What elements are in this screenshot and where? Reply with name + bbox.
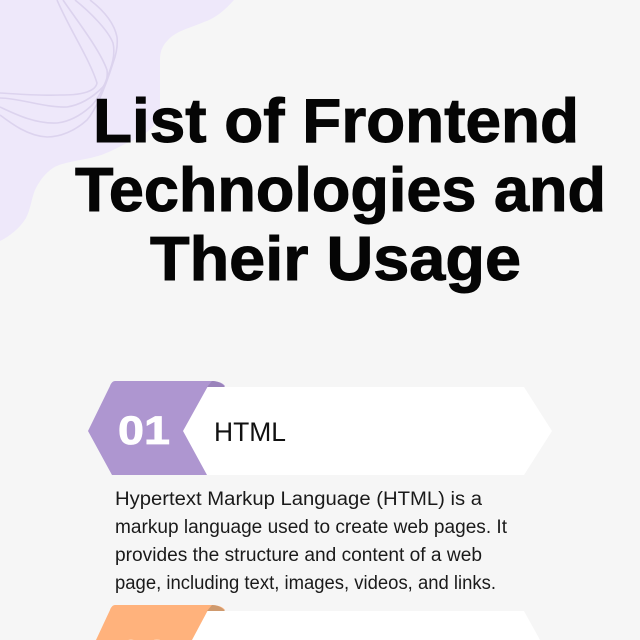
item 01: HTML banner	[88, 381, 552, 475]
title: List of Frontend	[93, 87, 579, 156]
decorative lilac blob with line swirl	[0, 0, 234, 241]
purple number tab	[88, 381, 225, 475]
title: Their Usage	[150, 225, 521, 294]
item 01 description: provides the structure and content of a web	[115, 545, 482, 566]
item 01 description: markup language used to create web pages. It	[115, 517, 508, 538]
number 01: 01	[118, 409, 170, 453]
item 01 description	[115, 489, 508, 594]
white label plate	[184, 611, 540, 640]
tab fold	[207, 605, 225, 611]
title: Technologies and	[75, 156, 606, 225]
item 01 description: page, including text, images, videos, and links.	[115, 573, 496, 594]
item 02 banner, cropped by page edge	[96, 605, 540, 640]
tab fold	[207, 381, 225, 387]
label HTML: HTML	[214, 417, 286, 447]
title	[75, 87, 606, 294]
item 01 description: Hypertext Markup Language (HTML) is a	[115, 489, 482, 510]
orange number tab	[96, 605, 225, 640]
white label plate	[183, 387, 552, 475]
